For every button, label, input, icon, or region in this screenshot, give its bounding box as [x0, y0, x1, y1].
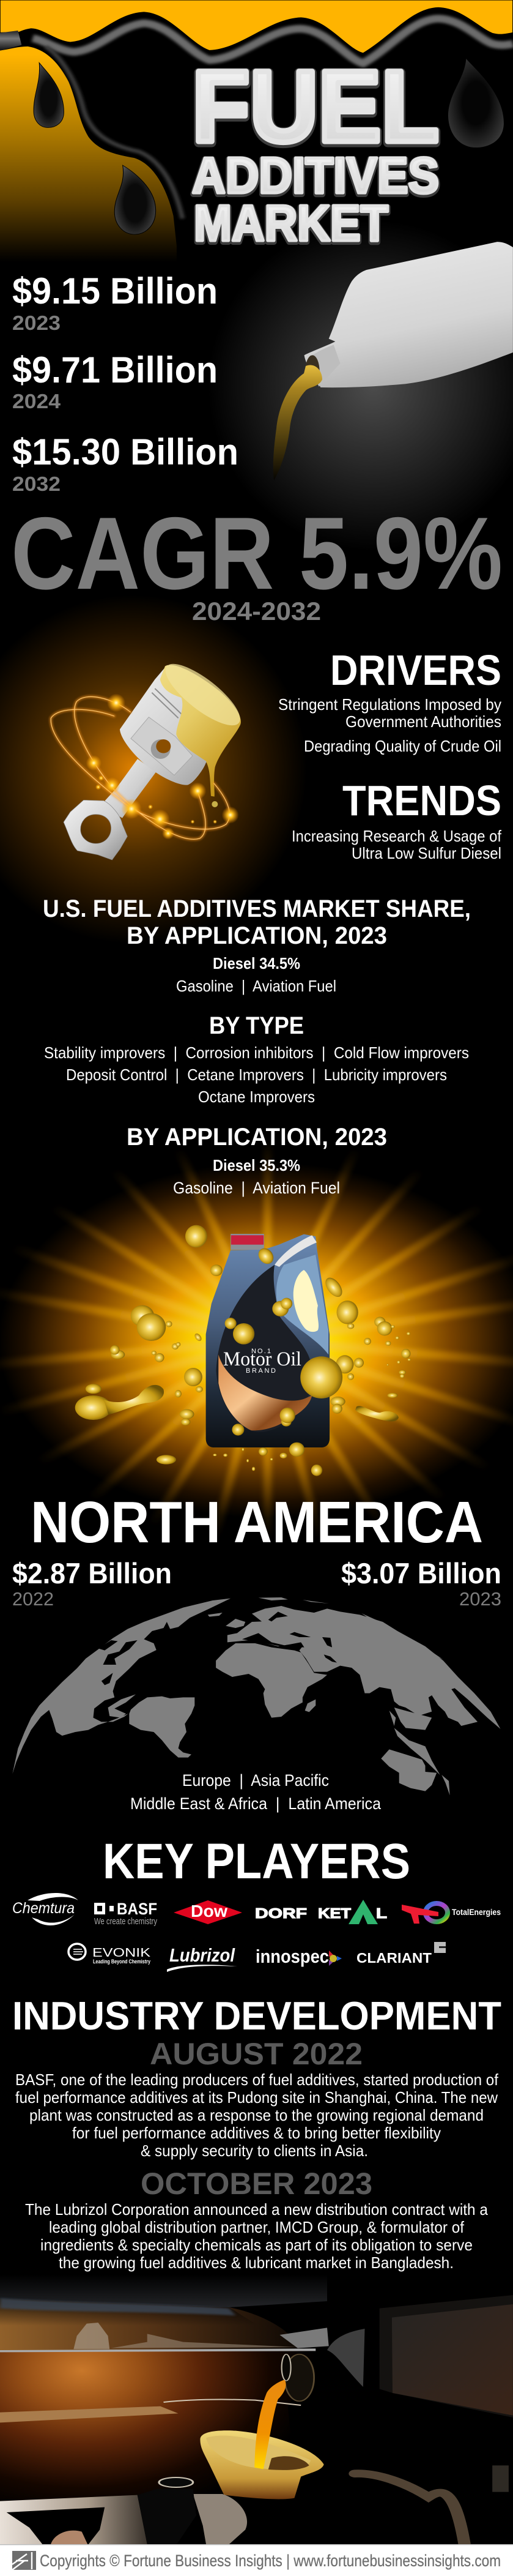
reflected silhouette: [73, 2323, 109, 2349]
top darkening of reflection: [0, 2299, 259, 2326]
panel: trends: [292, 777, 502, 862]
stat: 2023 value: [12, 271, 218, 334]
logo: Ketal: L: [376, 1905, 387, 1921]
logo: Fortune Business Insights: [12, 2551, 36, 2570]
hood right highlight: [279, 2328, 329, 2348]
panel: trends: Ultra Low Sulfur Diesel: [352, 844, 501, 862]
header: dripping oil illustration: [0, 0, 513, 263]
Caribbean arc: [108, 1694, 136, 1718]
oil drop middle: [114, 165, 156, 234]
title: Fuel Additives Market: ADDITIVES: [192, 148, 439, 205]
title: Fuel Additives Market: MARKET: [194, 196, 388, 253]
development: October 2023: OCTOBER 2023: [141, 2167, 372, 2201]
oil drop left: [34, 63, 64, 127]
stat: 2024 value: $9.71 Billion: [12, 349, 218, 390]
connecting rod: [105, 759, 156, 818]
logo: Ketal: [318, 1900, 387, 1924]
stat: 2023 value: 2023: [12, 312, 61, 334]
panel: drivers: Government Authorities: [345, 712, 501, 731]
dark bottle grey edge: [327, 2329, 365, 2387]
title: Fuel Additives Market: FUEL: [192, 51, 439, 165]
logo row 1: [12, 1893, 501, 1927]
development: October 2023: [25, 2167, 488, 2272]
footer bar: [0, 2544, 513, 2576]
world map globe: [12, 1597, 501, 1795]
panel: by application: Gasoline | Aviation Fuel: [173, 1179, 340, 1197]
logo: Chemtura: Chemtura: [12, 1900, 75, 1917]
oil flow edge highlight: [46, 47, 183, 218]
stat: North America 2023: [341, 1557, 501, 1610]
logo: TotalEnergies: TotalEnergies: [452, 1907, 501, 1917]
Arctic islands: [259, 1597, 443, 1660]
logo: TotalEnergies: [402, 1903, 501, 1924]
title: Fuel Additives Market: ADDITIVES: [192, 147, 439, 204]
North America landmass: [12, 1599, 231, 1774]
logo: Evonik: Leading Beyond Chemistry: [93, 1958, 151, 1965]
CAGR headline: 2024-2032: [192, 597, 321, 625]
South America: [129, 1697, 194, 1758]
funnel: [200, 2430, 324, 2499]
icon: pouring white oil bottle: [273, 242, 513, 480]
jug cap: [231, 1234, 264, 1250]
rod big end: [64, 800, 127, 860]
panel: U.S. market share: Gasoline | Aviation Fuel: [176, 977, 336, 995]
panel: by application: BY APPLICATION, 2023: [127, 1124, 387, 1151]
panel: U.S. market share: U.S. FUEL ADDITIVES MARKET SHARE,: [43, 895, 471, 922]
Australia: [381, 1749, 437, 1791]
sparks: [86, 693, 239, 840]
title: Fuel Additives Market: FUEL: [192, 50, 439, 163]
stat: 2032 value: [12, 431, 238, 495]
logo: Ketal: KET: [318, 1905, 351, 1921]
stat: North America 2022: [12, 1557, 172, 1610]
development: October 2023: ingredients & specialty chemicals as part of its obligation to serve: [40, 2236, 473, 2254]
jug handle grip: [276, 1255, 328, 1354]
panel: U.S. market share: [43, 895, 471, 995]
oil drop right: [448, 59, 504, 147]
jug label text: NO.1: [251, 1348, 271, 1355]
Madagascar: [305, 1700, 316, 1712]
hood body orange glow: [0, 2351, 317, 2501]
piston body: [120, 665, 240, 785]
piston pin hole: [151, 739, 171, 759]
other regions list: [130, 1771, 382, 1813]
title: Fuel Additives Market: [192, 50, 439, 253]
stat: 2032 value: 2032: [12, 472, 61, 495]
oil top surface: [157, 654, 248, 735]
inland seas: [242, 1611, 337, 1663]
heading: Key Players: KEY PLAYERS: [103, 1834, 410, 1889]
Hudson Bay and lakes: [98, 1640, 138, 1685]
dipstick rod: [163, 2399, 301, 2405]
orbit rings: [51, 696, 229, 839]
piston rings: [152, 689, 182, 718]
development: August 2022: [15, 2037, 499, 2160]
development: August 2022: for fuel performance additives & to bring better flexibility: [72, 2124, 441, 2142]
hood dark top: [0, 2275, 327, 2307]
jug label text: Motor Oil: [223, 1348, 301, 1370]
stat: 2024 value: [12, 349, 218, 413]
reflected plate: [111, 2334, 298, 2348]
right connector: [492, 2465, 509, 2492]
piston recess: [131, 717, 193, 775]
engine round knob: [51, 2531, 87, 2544]
Africa: [216, 1643, 327, 1718]
piston orange glow: [0, 595, 307, 944]
logo row 2: [68, 1942, 446, 1972]
stat: North America 2023: $3.07 Billion: [341, 1557, 501, 1589]
jug label: [216, 1265, 312, 1432]
other regions list: Middle East & Africa | Latin America: [130, 1794, 382, 1813]
panel: drivers: [278, 646, 501, 755]
oil stream: [254, 2380, 286, 2469]
development: October 2023: leading global distribution partner, IMCD Group, & formulator of: [49, 2218, 465, 2236]
funnel interior: [206, 2436, 311, 2470]
rubber hose: [355, 2474, 465, 2544]
panel: by application: [127, 1124, 387, 1197]
panel: U.S. market share: Diesel 34.5%: [213, 954, 300, 973]
heading: North America: NORTH AMERICA: [31, 1490, 483, 1555]
panel: by type: Stability improvers | Corrosion inhibitors | Cold Flow improvers: [44, 1043, 469, 1062]
stat: North America 2022: $2.87 Billion: [12, 1557, 172, 1589]
panel: by type: [44, 1012, 469, 1106]
logo: BASF: We create chemistry: [94, 1916, 157, 1927]
stat: North America 2023: 2023: [459, 1588, 501, 1610]
logo: Dorf: DORF: [255, 1905, 307, 1921]
icon: piston with oil and orbit sparks: [51, 654, 248, 860]
golden droplets: [75, 1225, 411, 1476]
glow behind pouring bottle: [208, 220, 513, 551]
panel: by type: Octane Improvers: [198, 1088, 315, 1106]
jug handle highlight: [275, 1235, 317, 1267]
label swoosh: [218, 1354, 312, 1430]
stat: 2024 value: 2024: [12, 390, 61, 413]
photo: oil poured into engine funnel: [0, 2275, 513, 2544]
New Zealand strip: [441, 1775, 450, 1795]
stat: 2023 value: $9.15 Billion: [12, 271, 218, 312]
icon: motor oil jug with golden droplets: [75, 1225, 411, 1476]
logo: BASF: [94, 1900, 157, 1927]
logo: Chemtura: [12, 1893, 78, 1925]
logo: Dow: [174, 1900, 242, 1924]
development: August 2022: plant was constructed as a response to the growing regional demand: [29, 2106, 484, 2124]
stat: North America 2022: 2022: [12, 1588, 54, 1610]
engine parts: [193, 2494, 247, 2544]
Indonesia islands: [389, 1708, 440, 1775]
stat: 2032 value: $15.30 Billion: [12, 431, 238, 472]
bottle neck: [282, 2354, 314, 2401]
reflected area above hood line: [0, 2299, 298, 2351]
oil drop: [212, 801, 218, 807]
logo: Clariant: [356, 1942, 446, 1966]
engine block: [0, 2495, 147, 2544]
oil hose: [0, 31, 21, 51]
panel: by type: Deposit Control | Cetane Improvers | Lubricity improvers: [66, 1066, 447, 1084]
Eurasia: [227, 1606, 501, 1729]
logo: Evonik: [68, 1944, 151, 1965]
oil filler port: [138, 2477, 196, 2544]
logo: Evonik: EVONIK: [92, 1946, 151, 1960]
logo: Dow: Dow: [191, 1902, 227, 1921]
panel: by type: BY TYPE: [209, 1012, 304, 1039]
engine recess: [7, 2507, 105, 2544]
logo: BASF: BASF: [117, 1900, 157, 1918]
development: October 2023: The Lubrizol Corporation announced a new distribution contract with a: [25, 2200, 488, 2219]
other regions list: Europe | Asia Pacific: [182, 1771, 329, 1790]
Iceland and Britain: [208, 1613, 245, 1628]
title: Fuel Additives Market: MARKET: [194, 195, 388, 252]
hood edge line: [0, 2348, 316, 2352]
jug handle hole: [293, 1270, 319, 1332]
logo: Clariant: CLARIANT: [356, 1950, 432, 1966]
blue reflection stripe: [0, 2298, 235, 2315]
amber area below oil flow: [0, 47, 177, 263]
golden light burst: [0, 1065, 513, 1616]
development: October 2023: the growing fuel additives & lubricant market in Bangladesh.: [59, 2253, 454, 2272]
panel: drivers: Stringent Regulations Imposed by: [278, 695, 501, 714]
panel: by application: Diesel 35.3%: [213, 1156, 300, 1174]
panel: U.S. market share: BY APPLICATION, 2023: [127, 922, 387, 949]
amber sky top with wave edge: [0, 0, 513, 53]
logo: Innospec: innospec: [256, 1946, 329, 1967]
logo: Lubrizol: Lubrizol: [169, 1944, 235, 1966]
oil coating piston: [160, 665, 241, 797]
oil surface highlight: [32, 18, 513, 64]
jug body: [206, 1234, 330, 1447]
development: August 2022: AUGUST 2022: [150, 2037, 363, 2071]
jug label text: BRAND: [246, 1367, 276, 1375]
heading: Industry Development: INDUSTRY DEVELOPMENT: [12, 1993, 501, 2038]
dipstick rail: [0, 2406, 179, 2422]
right side panel: [380, 2295, 513, 2417]
development: August 2022: & supply security to clients in Asia.: [141, 2141, 368, 2160]
